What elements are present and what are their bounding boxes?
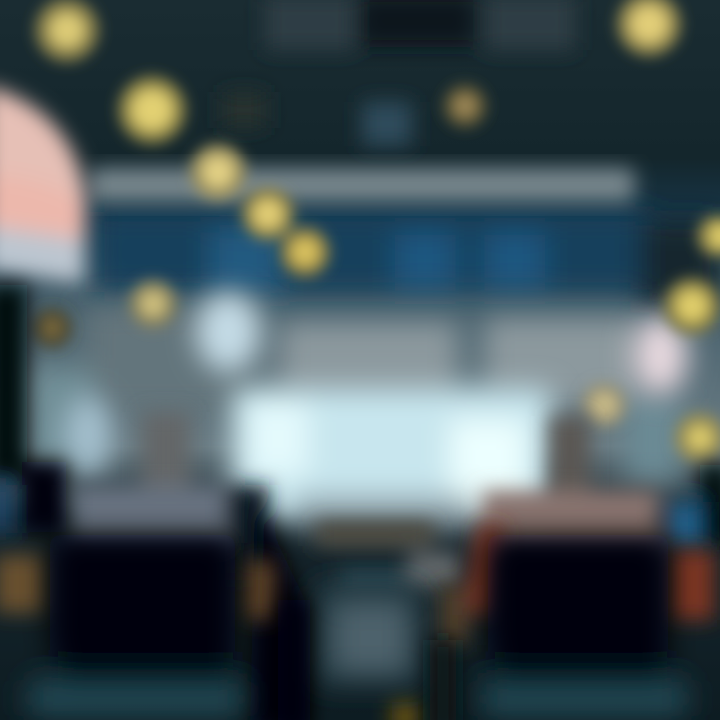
middle grey panels xyxy=(18,305,681,482)
warm side accents xyxy=(0,525,714,720)
left dark column xyxy=(0,285,66,533)
title strip xyxy=(90,168,635,202)
audience shoulders xyxy=(72,465,720,720)
right seat xyxy=(482,535,687,716)
aisle shadows xyxy=(278,600,456,720)
glow highlights xyxy=(64,292,688,475)
ceiling fixtures xyxy=(222,0,575,146)
pink panel on left xyxy=(0,85,86,284)
yellow lights xyxy=(32,0,720,463)
blue band behind panels xyxy=(95,212,720,310)
central bright screen xyxy=(232,388,552,529)
centre seat xyxy=(315,585,421,685)
left seat xyxy=(28,535,243,716)
audience heads xyxy=(142,412,590,511)
